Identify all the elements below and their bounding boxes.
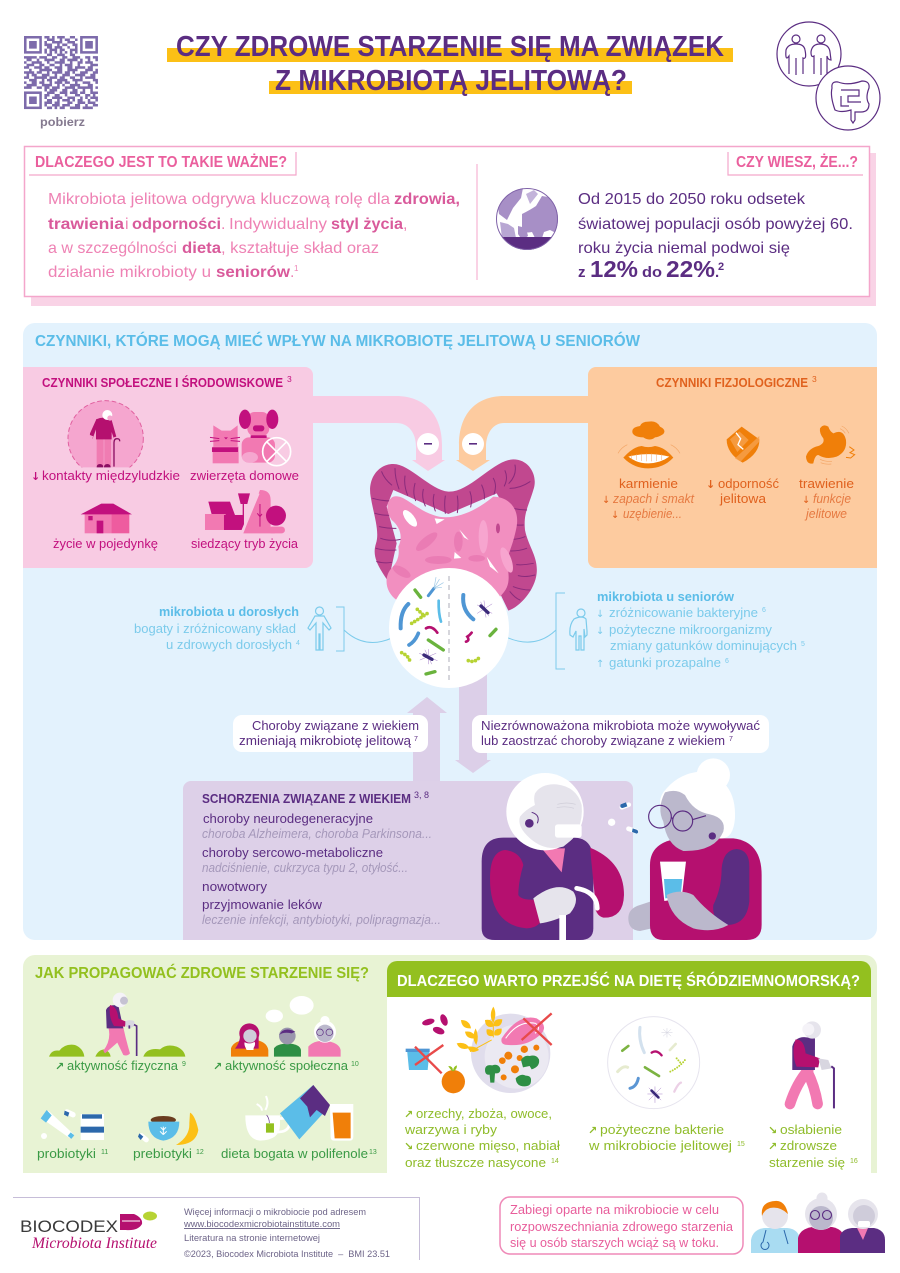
illustration: microbiota circle: [389, 568, 509, 688]
logo: Biocodex: [20, 1212, 157, 1252]
arrow: physiological factors to gut: [456, 396, 592, 471]
text block: why it matters: .: [221, 216, 225, 233]
text: senior microbiota: ↓: [596, 626, 604, 637]
callout: ongoing interventions: się u osób starszych wciąż są w toku.: [510, 1236, 719, 1250]
text block: why it matters: a w szczególności: [48, 240, 177, 257]
title: Z MIKROBIOTĄ JELITOWĄ?: [275, 65, 627, 97]
text: outcomes: starzenie się: [769, 1155, 845, 1170]
text block: did you know: .: [715, 264, 719, 281]
icon: senior outline: [570, 609, 587, 650]
icon: adult outline: [308, 607, 331, 650]
text: outcomes: ↗: [768, 1140, 777, 1153]
text block: did you know: z: [578, 264, 586, 281]
QR code: [24, 37, 98, 108]
text block: why it matters: styl życia: [331, 216, 403, 233]
label: social activity: 10: [351, 1061, 359, 1068]
icon: beneficial bacteria circle: [608, 1017, 700, 1109]
heading tab: why it matters: [29, 152, 296, 175]
icon: seniors in circle: [777, 22, 841, 86]
label: social activity: aktywność społeczna: [225, 1058, 349, 1073]
QR label: pobierz: pobierz: [40, 117, 85, 129]
panel: physiological factors: [588, 367, 877, 568]
text: gut immunity: [708, 478, 779, 506]
callout: imbalanced microbiota: lub zaostrzać choroby związane z wiekiem: [481, 734, 725, 748]
text block: why it matters: zdrowia,: [394, 191, 460, 208]
text: foods: warzywa i ryby: [404, 1122, 498, 1137]
text block: diseases: 3, 8: [414, 790, 429, 800]
figure: man: [482, 773, 624, 942]
text block: why it matters: Mikrobiota jelitowa odgrywa kluczową rolę dla: [48, 191, 390, 208]
text block: did you know: do: [642, 264, 662, 281]
heading: social factors: CZYNNIKI SPOŁECZNE I ŚRODOWISKOWE: [42, 375, 283, 390]
text: beneficial bacteria: w mikrobiocie jelitowej: [588, 1138, 732, 1153]
icon: house: [81, 504, 132, 533]
icon: sofa and trees: [205, 490, 286, 533]
panel: social and environmental factors: [23, 367, 313, 568]
text: footer info: [183, 1207, 390, 1260]
text: foods: ↗: [404, 1108, 413, 1121]
heading: physiological factors: 3: [812, 374, 817, 384]
text block: why it matters: [48, 191, 460, 281]
title: [167, 31, 733, 97]
logo: Biocodex: Microbiota Institute: [31, 1235, 157, 1252]
text: foods: 14: [551, 1158, 559, 1165]
text: footer info: Więcej informacji o mikrobiocie pod adresem: [184, 1207, 366, 1218]
text block: did you know: światowej populacji osób powyżej 60.: [578, 216, 853, 233]
text: beneficial bacteria: pożyteczne bakterie: [600, 1122, 724, 1137]
callout: imbalanced microbiota: Niezrównoważona mikrobiota może wywoływać: [481, 719, 760, 733]
icon: Mediterranean plate: [406, 1007, 552, 1093]
text: chewing: ↓: [602, 495, 610, 506]
callout: ongoing interventions: Zabiegi oparte na mikrobiocie w celu: [510, 1203, 719, 1217]
label: social contacts: kontakty międzyludzkie: [42, 468, 180, 483]
text: chewing: zapach i smakt: [612, 492, 695, 506]
text block: diseases: [202, 790, 441, 927]
panel: healthy ageing promotion: [23, 955, 877, 1173]
illustration: elderly couple: [482, 758, 762, 942]
icon: walking senior with cane: [790, 1021, 834, 1108]
callout: diseases change microbiota: [233, 715, 428, 752]
text block: diseases: choroba Alzheimera, choroba Parkinsona...: [202, 826, 432, 841]
illustration: doctor and seniors: [751, 1192, 885, 1253]
icon: tea, chocolate and juice: [245, 1085, 353, 1141]
text block: diseases: choroby sercowo-metaboliczne: [202, 845, 383, 860]
text: beneficial bacteria: [588, 1122, 745, 1153]
text: foods: orzechy, zboża, owoce,: [416, 1106, 552, 1121]
text: foods: [404, 1106, 560, 1170]
callout: diseases change microbiota: zmieniają mikrobiotę jelitową: [239, 734, 411, 748]
text: senior microbiota: 6: [725, 658, 729, 665]
text: senior microbiota: ↑: [596, 659, 604, 670]
text: senior microbiota: ↓: [596, 609, 604, 620]
arrow: diseases change microbiota (up): [407, 697, 447, 781]
callout: imbalanced microbiota: 7: [729, 736, 733, 743]
icon: cat and dog crossed out: [210, 410, 291, 466]
arrow: social factors to gut: [310, 396, 445, 471]
heading tab: why it matters: DLACZEGO JEST TO TAKIE WAŻNE?: [35, 154, 287, 171]
text block: why it matters: odporności: [132, 216, 221, 233]
text: gut immunity: ↓: [706, 478, 715, 491]
text: chewing: [602, 476, 695, 521]
text block: why it matters: ,: [403, 216, 407, 233]
text: footer info: www.biocodexmicrobiotainstitute.com: [183, 1219, 340, 1230]
text: adult microbiota: 4: [296, 640, 300, 647]
label: prebiotics: prebiotyki: [133, 1146, 192, 1161]
text block: why it matters: trawienia: [48, 216, 124, 233]
text: chewing: karmienie: [619, 476, 678, 491]
figure: woman: [798, 1192, 844, 1253]
text block: why it matters: i: [125, 216, 129, 233]
logo: Biocodex: BIOCODEX: [20, 1217, 118, 1236]
text: outcomes: ↘: [768, 1124, 777, 1137]
text block: did you know: Od 2015 do 2050 roku odsetek: [578, 191, 806, 208]
text block: diseases: choroby neurodegeneracyjne: [203, 811, 373, 826]
text: gut immunity: jelitowa: [719, 491, 767, 506]
text: senior microbiota: gatunki prozapalne: [609, 655, 721, 670]
text block: why it matters: .: [290, 264, 294, 281]
text block: diseases: leczenie infekcji, antybiotyki, polipragmazja...: [202, 912, 441, 927]
panel: age-related diseases: [183, 781, 633, 940]
icon: gut in circle: [816, 66, 880, 130]
line: adults to circle: [344, 630, 392, 642]
text block: why it matters: Indywidualny: [229, 216, 327, 233]
text: chewing: ↓: [611, 510, 619, 521]
label: physical activity: ↗: [55, 1060, 64, 1073]
text block: diseases: nadciśnienie, cukrzyca typu 2, otyłość...: [202, 860, 408, 875]
heading: Mediterranean diet: DLACZEGO WARTO PRZEJŚĆ NA DIETĘ ŚRÓDZIEMNOMORSKĄ?: [397, 971, 860, 990]
text block: why it matters: seniorów: [216, 264, 291, 281]
panel: Mediterranean diet: [387, 961, 871, 1173]
figure: man: [840, 1199, 885, 1253]
callout: ongoing interventions: [500, 1197, 743, 1254]
text: gut immunity: odporność: [718, 476, 779, 491]
text block: why it matters: , kształtuje skład oraz: [221, 240, 379, 257]
bracket: adults: [336, 607, 344, 651]
text block: why it matters: 1: [294, 264, 299, 273]
icon: social group: [231, 996, 341, 1057]
label: polyphenol-rich diet: dieta bogata w polifenole: [221, 1146, 368, 1161]
icon: walking senior with bushes: [49, 993, 185, 1057]
callout: diseases change microbiota: Choroby związane z wiekiem: [252, 719, 419, 733]
heading: physiological factors: CZYNNIKI FIZJOLOGICZNE: [656, 376, 808, 390]
bracket: seniors: [556, 593, 565, 669]
icon: elderly person in circle: [68, 401, 143, 476]
heading: factors: CZYNNIKI, KTÓRE MOGĄ MIEĆ WPŁYW NA MIKROBIOTĘ JELITOWĄ U SENIORÓW: [35, 331, 641, 350]
figure: woman: [628, 758, 762, 940]
text block: did you know: 22%: [666, 256, 715, 282]
text block: diseases: przyjmowanie leków: [202, 897, 323, 912]
text: digestion: jelitowe: [804, 507, 847, 521]
text: beneficial bacteria: 15: [737, 1141, 745, 1148]
text: adult microbiota: mikrobiota u dorosłych: [159, 604, 299, 619]
text: footer info: Literatura na stronie internetowej: [184, 1233, 320, 1244]
icon: globe: [496, 188, 558, 250]
text: senior microbiota: mikrobiota u seniorów: [597, 589, 735, 604]
text: digestion: funkcje: [813, 492, 851, 506]
figure: carer: [751, 1201, 800, 1253]
figure: pills: [608, 802, 639, 834]
footer: logo and references: [13, 1198, 420, 1260]
icon: gut immunity shield: [727, 427, 759, 463]
panel: factors: [23, 323, 877, 942]
text: outcomes: [768, 1122, 858, 1170]
label: living alone: życie w pojedynkę: [53, 536, 158, 551]
label: physical activity: 9: [182, 1061, 186, 1068]
label: polyphenol-rich diet: 13: [369, 1149, 377, 1156]
panel: why it matters and did you know: [24, 146, 876, 306]
label: prebiotics: 12: [196, 1149, 204, 1156]
title: CZY ZDROWE STARZENIE SIĘ MA ZWIĄZEK: [176, 31, 724, 63]
text: senior microbiota: zróżnicowanie bakteryjne: [609, 605, 758, 620]
text block: why it matters: działanie mikrobioty u: [48, 264, 211, 281]
icon: stomach: [806, 425, 855, 464]
icon: nose and mouth: [618, 421, 680, 468]
text: footer info: ©2023, Biocodex Microbiota Institute – BMI 23.51: [184, 1249, 390, 1260]
arrow: microbiota causes diseases (down): [455, 670, 491, 773]
icon: prebiotics bowl and banana: [138, 1113, 198, 1145]
text: senior microbiota: 5: [801, 641, 805, 648]
text: digestion: ↓: [802, 495, 810, 506]
label: physical activity: aktywność fizyczna: [67, 1058, 179, 1073]
label: social contacts: ↓: [31, 470, 40, 483]
icon: probiotics: [41, 1108, 104, 1140]
callout: diseases change microbiota: 7: [414, 736, 418, 743]
text block: diseases: SCHORZENIA ZWIĄZANE Z WIEKIEM: [202, 792, 411, 806]
text: senior microbiota: pożyteczne mikroorganizmy: [609, 622, 772, 637]
label: sedentary lifestyle: siedzący tryb życia: [191, 536, 299, 551]
heading tab: did you know: CZY WIESZ, ŻE...?: [736, 154, 858, 171]
text: foods: ↘: [404, 1140, 413, 1153]
heading tab: did you know: [728, 152, 863, 175]
callout: imbalanced microbiota: [472, 715, 769, 753]
text: senior microbiota: [596, 589, 805, 670]
heading: how to promote: JAK PROPAGOWAĆ ZDROWE STARZENIE SIĘ?: [35, 963, 369, 982]
text: foods: oraz tłuszcze nasycone: [405, 1155, 546, 1170]
text: outcomes: osłabienie: [780, 1122, 842, 1137]
label: probiotics: probiotyki: [37, 1146, 96, 1161]
text: beneficial bacteria: ↗: [588, 1124, 597, 1137]
line: seniors to circle: [506, 630, 556, 642]
heading: social factors: 3: [287, 374, 292, 384]
callout: ongoing interventions: rozpowszechniania zdrowego starzenia: [510, 1220, 733, 1234]
text: adult microbiota: u zdrowych dorosłych: [166, 637, 292, 652]
label: pets: zwierzęta domowe: [190, 468, 299, 483]
text: digestion: [799, 476, 854, 521]
text: foods: czerwone mięso, nabiał: [416, 1138, 560, 1153]
text block: did you know: roku życia niemal podwoi się: [578, 240, 790, 257]
text: senior microbiota: zmiany gatunków dominujących: [610, 638, 797, 653]
text: adult microbiota: [134, 604, 300, 652]
text block: diseases: nowotwory: [202, 879, 268, 894]
text block: did you know: [578, 191, 853, 282]
text block: did you know: 2: [718, 261, 724, 273]
text: senior microbiota: 6: [762, 607, 766, 614]
label: probiotics: 11: [101, 1149, 108, 1156]
text: outcomes: zdrowsze: [780, 1138, 837, 1153]
label: social activity: ↗: [213, 1060, 222, 1073]
text block: why it matters: dieta: [182, 240, 221, 257]
text: outcomes: 16: [850, 1158, 858, 1165]
text: digestion: trawienie: [799, 476, 854, 491]
illustration: intestine: [370, 459, 537, 611]
text: chewing: uzębienie...: [623, 507, 682, 521]
text: adult microbiota: bogaty i zróżnicowany skład: [134, 621, 296, 636]
text block: did you know: 12%: [590, 256, 638, 282]
